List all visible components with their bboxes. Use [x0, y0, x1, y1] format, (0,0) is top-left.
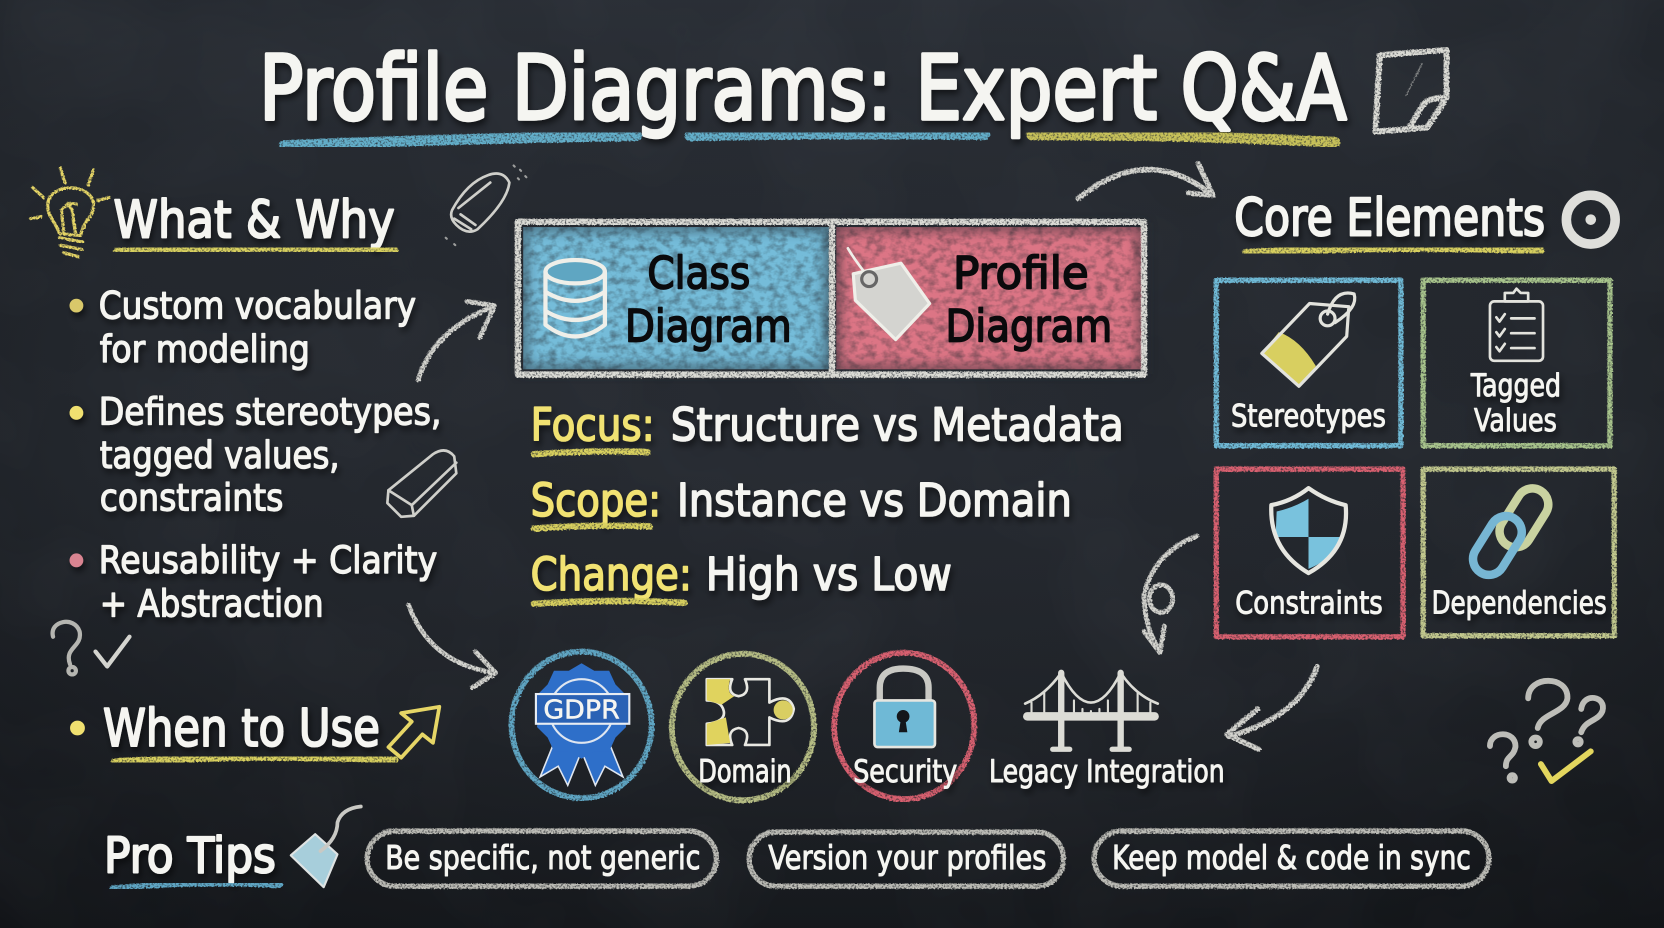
- label: domain: Domain: [698, 754, 792, 790]
- arrow: to core elements: [1078, 163, 1213, 198]
- bullet list: for modeling: [100, 328, 310, 371]
- row: scope: [531, 474, 1072, 527]
- card: dependencies: [1423, 469, 1614, 636]
- arrow: to when to use row: [409, 605, 496, 688]
- tip 1: Be specific, not generic: [385, 838, 700, 877]
- title: Profile Diagrams: Expert Q&A: [259, 37, 1347, 141]
- arrow: from core elements to legacy integration: [1227, 666, 1317, 749]
- icon: chalk circle: [1566, 195, 1615, 244]
- row underlines: [534, 451, 684, 604]
- icon: database: [545, 260, 605, 336]
- icon: question mark and check: [53, 622, 129, 674]
- item: gdpr: [512, 652, 652, 798]
- bullet list: Defines stereotypes,: [99, 390, 441, 433]
- title underlines: [284, 134, 1335, 145]
- icon: bridge: [1025, 673, 1158, 749]
- icon: chain links: [1467, 482, 1554, 581]
- bullet list: + Abstraction: [100, 583, 324, 626]
- row: focus: Structure vs Metadata: [671, 398, 1124, 451]
- panel: what and why: [31, 166, 526, 674]
- row: focus: [531, 398, 1124, 451]
- heading underline: [115, 757, 395, 762]
- card: constraints: [1216, 469, 1403, 637]
- icon: shield: [1271, 488, 1346, 573]
- tip 3: Keep model & code in sync: [1112, 838, 1471, 877]
- item: security: [834, 653, 974, 799]
- label: stereotypes: Stereotypes: [1231, 399, 1386, 435]
- profile diagram label: Diagram: [946, 301, 1112, 353]
- item: legacy integration: [989, 673, 1225, 790]
- tip 3: [1094, 831, 1489, 886]
- label: tagged values: Tagged: [1470, 368, 1561, 404]
- tip 1: [367, 831, 716, 886]
- label: dependencies: Dependencies: [1432, 585, 1607, 621]
- icon: light bulb: [31, 168, 109, 257]
- panel: pro tips: [104, 807, 1489, 888]
- label: constraints: Constraints: [1235, 585, 1383, 621]
- class diagram label: Class: [647, 248, 750, 300]
- bullet list: constraints: [100, 476, 283, 519]
- heading underline: [117, 248, 395, 252]
- comparison frame: [518, 222, 1144, 375]
- profile diagram fill: [836, 227, 1142, 369]
- panel: when to use items: [512, 652, 1225, 800]
- icon: gdpr ribbon: [536, 663, 629, 785]
- card: stereotypes: [1216, 280, 1401, 446]
- label: security: Security: [853, 754, 957, 790]
- row: scope: Instance vs Domain: [677, 474, 1072, 527]
- bullet list: Custom vocabulary: [99, 284, 416, 327]
- class diagram label: Diagram: [625, 301, 792, 353]
- panel: core elements: [1216, 189, 1615, 637]
- class diagram label: [625, 248, 792, 353]
- icon: tag: [848, 248, 930, 340]
- icon: blue tag: [291, 807, 361, 887]
- panel: class versus profile comparison: [518, 222, 1144, 375]
- heading: pro tips: Pro Tips: [104, 827, 276, 884]
- profile diagram label: [946, 248, 1112, 353]
- when to use heading: [70, 699, 439, 762]
- row: focus: Focus:: [531, 398, 655, 451]
- row: change: High vs Low: [706, 548, 952, 601]
- bullet list: [70, 284, 441, 626]
- icon: eraser top: [446, 166, 526, 245]
- label: tagged values: Values: [1474, 403, 1557, 439]
- icon: stereotype tag: [1262, 293, 1355, 386]
- icon: puzzle piece: [707, 679, 794, 745]
- tip 2: Version your profiles: [768, 838, 1046, 877]
- icon: yellow arrow: [388, 707, 439, 758]
- label: legacy integration: Legacy Integration: [989, 754, 1225, 790]
- bullet: [70, 721, 85, 735]
- arrow: to comparison box: [418, 301, 495, 380]
- heading: core elements: Core Elements: [1234, 189, 1545, 249]
- profile diagram label: Profile: [953, 248, 1089, 300]
- icon: gdpr ribbon: GDPR: [543, 695, 620, 725]
- tip 2: [749, 832, 1063, 886]
- row: scope: Scope:: [531, 474, 661, 527]
- row: change: Change:: [531, 548, 692, 601]
- label: tagged values: [1470, 368, 1561, 439]
- bullet list: tagged values,: [100, 434, 340, 477]
- icon: padlock: [874, 669, 935, 747]
- heading text: When to Use: [103, 699, 380, 759]
- item: domain: [672, 654, 814, 800]
- arrow: looped down from constraints: [1144, 536, 1197, 653]
- class diagram fill: [523, 227, 829, 369]
- icon: curled document: [1375, 50, 1446, 132]
- heading underline: [1246, 248, 1541, 253]
- comparison rows: [531, 398, 1124, 604]
- icon: clipboard checklist: [1490, 289, 1543, 361]
- heading underline: [112, 884, 280, 888]
- dark edge smudges: [523, 227, 1142, 369]
- icon: eraser middle: [387, 450, 456, 517]
- heading: what and why: What & Why: [114, 191, 395, 251]
- bullet list: Reusability + Clarity: [99, 539, 437, 582]
- card: tagged values: [1423, 280, 1610, 446]
- row: change: [531, 548, 952, 601]
- icon: question marks and yellow check: [1490, 681, 1603, 781]
